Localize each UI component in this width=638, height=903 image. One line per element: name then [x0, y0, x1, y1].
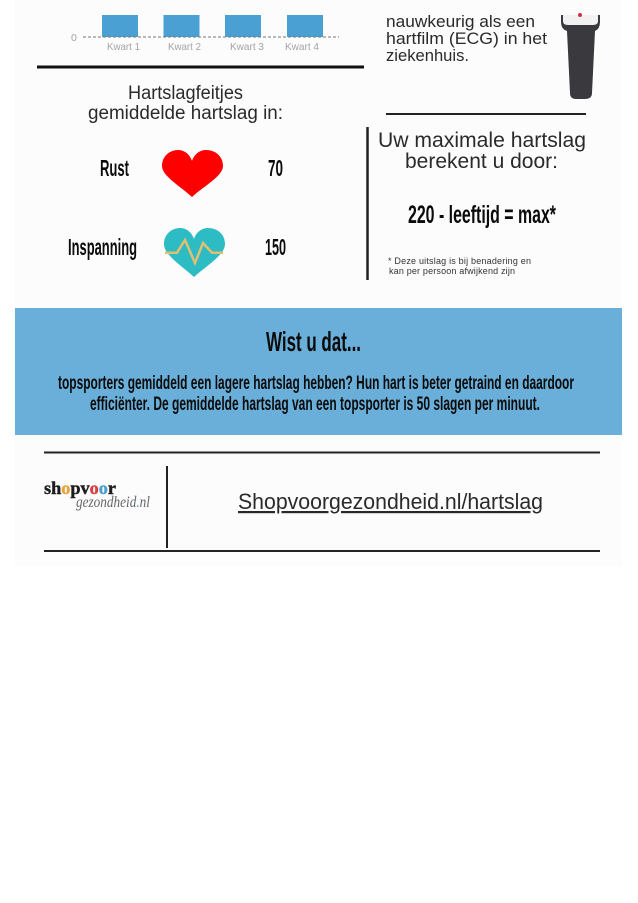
bar chart: Kwart 2	[168, 41, 201, 53]
bar chart: Kwart 3	[230, 41, 264, 53]
row: inspanning: Inspanning	[68, 234, 137, 260]
heading: Hartslagfeitjes: gemiddelde hartslag in:	[88, 103, 283, 124]
link: Shopvoorgezondheid.nl/hartslag: Shopvoorgezondheid.nl/hartslag	[238, 489, 543, 514]
icon: red heart	[162, 150, 223, 197]
text block: maximum heart rate: kan per persoon afwijkend zijn	[389, 266, 515, 276]
background panel	[15, 0, 622, 566]
text block: maximum heart rate: * Deze uitslag is bij benadering en	[388, 256, 531, 266]
bar chart: Kwart 1	[107, 41, 140, 53]
row: rust: 70	[268, 155, 283, 181]
icon: heart rate wrist strap	[561, 13, 600, 99]
heading: Hartslagfeitjes: Hartslagfeitjes	[128, 83, 243, 104]
logo: shopvoorgezondheid.nl: gezondheid.nl	[76, 494, 150, 511]
heading: Hartslagfeitjes	[88, 83, 283, 124]
row: inspanning	[68, 228, 286, 277]
bar chart: Kwart 4	[285, 41, 319, 53]
text block: ECG note	[386, 12, 547, 65]
text block: maximum heart rate	[378, 129, 586, 276]
text block: maximum heart rate: berekent u door:	[405, 150, 558, 173]
callout: Wist u dat	[15, 308, 622, 435]
text block: ECG note: ziekenhuis.	[386, 46, 469, 65]
text block: maximum heart rate: Uw maximale hartslag	[378, 129, 586, 152]
text block: maximum heart rate: 220 - leeftijd = max*	[408, 201, 556, 229]
text block: ECG note: hartfilm (ECG) in het	[386, 29, 547, 48]
logo: shopvoorgezondheid.nl: shopvoor	[44, 478, 116, 498]
row: rust: Rust	[100, 155, 129, 181]
logo: shopvoorgezondheid.nl	[44, 478, 150, 511]
bar chart	[71, 15, 339, 53]
icon: teal heart with pulse	[164, 228, 225, 277]
row: rust	[100, 150, 283, 197]
callout: Wist u dat: Wist u dat...	[266, 326, 361, 357]
text block: ECG note: nauwkeurig als een	[386, 12, 535, 31]
bar chart: 0	[71, 32, 77, 44]
row: inspanning: 150	[265, 234, 286, 260]
